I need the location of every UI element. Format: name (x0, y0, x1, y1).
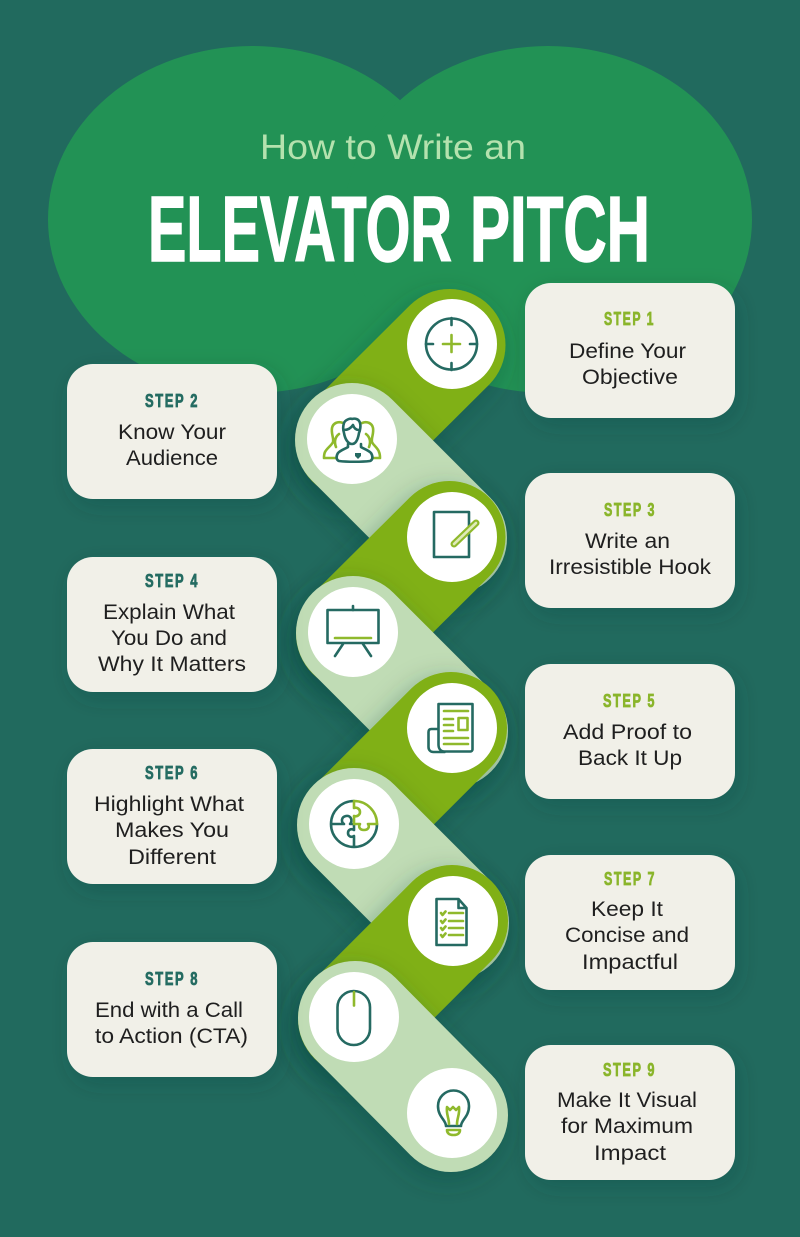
icon: computer mouse (338, 991, 370, 1045)
step 1 card: Define Your (569, 340, 686, 363)
step 2 card: Know Your (118, 421, 226, 444)
step 6 card: Makes You (115, 819, 229, 842)
step 5 card (525, 664, 735, 799)
step 3 card (525, 473, 735, 608)
title (148, 128, 650, 281)
step 9 card: Impact (594, 1142, 666, 1165)
step 4 card (67, 557, 277, 692)
step 2 card (67, 364, 277, 499)
step 6 card: Highlight What (94, 793, 244, 816)
step 3 card: STEP 3 (604, 500, 656, 520)
icon: target (426, 318, 477, 370)
icon: puzzle globe (331, 801, 377, 847)
step 4 card: Why It Matters (98, 653, 246, 676)
step 7 card: Concise and (565, 924, 689, 947)
step 5 card: STEP 5 (603, 691, 656, 711)
step 8 card: to Action (CTA) (95, 1025, 248, 1048)
icon: audience (324, 419, 380, 462)
step 3 card: Write an (585, 530, 670, 553)
step 4 card: You Do and (111, 627, 227, 650)
title: Elevator Pitch: PITCH (470, 177, 650, 281)
step 2 card: STEP 2 (145, 391, 199, 411)
step 1 card (525, 283, 735, 418)
step 5 card: Add Proof to (563, 721, 692, 744)
zigzag connector capsules (352, 345, 452, 1115)
step 1 card: Objective (582, 366, 678, 389)
step 7 card: STEP 7 (604, 869, 656, 889)
step 9 card: Make It Visual (557, 1089, 697, 1112)
step 5 card: Back It Up (578, 747, 682, 770)
step 9 card: STEP 9 (603, 1060, 656, 1080)
icon: checklist document (436, 899, 466, 945)
icon: light bulb (438, 1090, 469, 1135)
step circles (307, 299, 498, 1158)
step 9 card: for Maximum (561, 1115, 693, 1138)
icon: presentation board (328, 606, 378, 656)
step 9 card (525, 1045, 735, 1180)
step 1 card: STEP 1 (604, 309, 655, 329)
step 7 card: Impactful (582, 951, 678, 974)
step 6 card: Different (128, 846, 216, 869)
header heart-shaped background (48, 46, 752, 393)
icon: newspaper (428, 704, 472, 752)
step 8 card: End with a Call (95, 999, 243, 1022)
subtitle: How to Write an: How to Write an (260, 128, 526, 167)
step 8 card: STEP 8 (145, 969, 199, 989)
step 4 card: STEP 4 (145, 571, 199, 591)
step 4 card: Explain What (103, 601, 235, 624)
icon: notepad and pencil (434, 512, 476, 557)
step 6 card: STEP 6 (145, 763, 199, 783)
step 7 card (525, 855, 735, 990)
step 7 card: Keep It (591, 898, 663, 921)
title: Elevator Pitch: ELEVATOR (148, 177, 452, 281)
step 6 card (67, 749, 277, 884)
step 3 card: Irresistible Hook (549, 556, 712, 579)
step 2 card: Audience (126, 447, 218, 470)
step 8 card (67, 942, 277, 1077)
